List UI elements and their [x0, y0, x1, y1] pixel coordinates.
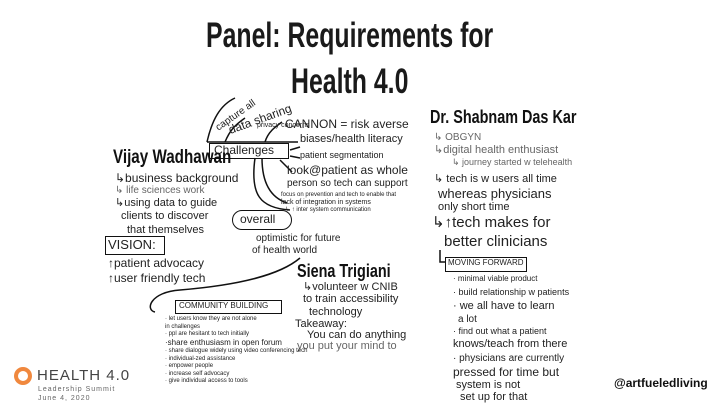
- panel: challenges: Challenges: [214, 143, 274, 157]
- community building list: ·share enthusiasm in open forum: [165, 338, 282, 346]
- community building list: · let users know they are not alone: [165, 316, 257, 322]
- speaker: Dr. Shabnam Das Kar: pressed for time but: [453, 365, 559, 379]
- community building list: in challenges: [165, 324, 200, 330]
- speaker: Vijay Wadhawan: VISION:: [108, 237, 156, 252]
- speaker: Dr. Shabnam Das Kar: · build relationship w patients: [453, 287, 569, 297]
- title: [206, 16, 493, 101]
- speaker: Dr. Shabnam Das Kar: ↳↑tech makes for: [432, 214, 550, 231]
- speaker: Dr. Shabnam Das Kar: a lot: [458, 314, 477, 325]
- overall callout: of health world: [252, 245, 317, 256]
- speaker: Vijay Wadhawan: ↑user friendly tech: [108, 271, 205, 285]
- speaker: Vijay Wadhawan: ↳ life sciences work: [115, 185, 205, 196]
- credit: @artfueledliving: [614, 376, 708, 390]
- panel: challenges: ↳ ↑ inter system communication: [285, 207, 371, 213]
- speaker: Dr. Shabnam Das Kar: [430, 107, 576, 403]
- speaker: Siena Trigiani: [295, 261, 406, 352]
- speaker: Siena Trigiani: Takeaway:: [295, 318, 347, 330]
- speaker: Vijay Wadhawan: that themselves: [127, 224, 204, 236]
- logo: Health 4.0: [14, 367, 130, 402]
- community building list: · ppl are hesitant to tech initially: [165, 331, 249, 337]
- speaker: Dr. Shabnam Das Kar: ↳ journey started w telehealth: [452, 157, 572, 167]
- panel: challenges: patient segmentation: [300, 150, 384, 160]
- community building list: COMMUNITY BUILDING: [179, 301, 268, 310]
- speaker: Dr. Shabnam Das Kar: · minimal viable product: [453, 274, 537, 283]
- panel: challenges: biases/health literacy: [300, 133, 403, 145]
- speaker: Vijay Wadhawan: [105, 147, 238, 285]
- logo: Health 4.0: Leadership Summit: [38, 386, 115, 393]
- speaker: Siena Trigiani: ↳volunteer w CNIB: [303, 281, 398, 293]
- speaker: Siena Trigiani: you put your mind to: [297, 340, 397, 352]
- speaker: Dr. Shabnam Das Kar: · physicians are currently: [453, 353, 564, 364]
- panel: challenges: person so tech can support: [287, 178, 408, 189]
- speaker: Vijay Wadhawan: Vijay Wadhawan: [113, 147, 231, 168]
- logo: Health 4.0: HEALTH 4.0: [37, 367, 130, 384]
- speaker: Dr. Shabnam Das Kar: better clinicians: [444, 233, 547, 250]
- speaker: Dr. Shabnam Das Kar: system is not: [456, 379, 520, 391]
- speaker: Siena Trigiani: technology: [309, 306, 362, 318]
- overall callout: overall: [240, 212, 275, 226]
- speaker: Vijay Wadhawan: ↳business background: [115, 171, 238, 185]
- speaker: Vijay Wadhawan: ↑patient advocacy: [108, 256, 204, 270]
- panel: challenges: lack of integration in systems: [281, 199, 371, 206]
- title: Health 4.0: [291, 62, 408, 101]
- community building list: · increase self advocacy: [165, 370, 229, 376]
- community building list: · share dialogue widely using video conferencing tech: [165, 348, 307, 354]
- speaker: Dr. Shabnam Das Kar: ↳ tech is w users all time: [434, 173, 557, 185]
- speaker: Siena Trigiani: You can do anything: [307, 329, 406, 341]
- overall callout: [232, 210, 340, 256]
- panel: challenges: privacy concerns: [257, 122, 310, 129]
- community building list: · empower people: [165, 363, 213, 369]
- speaker: Dr. Shabnam Das Kar: knows/teach from there: [453, 338, 567, 350]
- speaker: Vijay Wadhawan: ↳using data to guide: [115, 197, 217, 209]
- speaker: Vijay Wadhawan: clients to discover: [121, 210, 208, 222]
- panel: challenges: focus on prevention and tech to enable that: [281, 192, 396, 198]
- community building list: · give individual access to tools: [165, 378, 248, 384]
- speaker: Dr. Shabnam Das Kar: whereas physicians: [438, 186, 551, 201]
- speaker: Dr. Shabnam Das Kar: ↳ OBGYN: [434, 132, 481, 143]
- speaker: Dr. Shabnam Das Kar: set up for that: [460, 391, 527, 403]
- panel: challenges: capture all: [214, 98, 258, 133]
- speaker: Dr. Shabnam Das Kar: MOVING FORWARD: [448, 258, 524, 267]
- community building list: · individual-zed assistance: [165, 356, 235, 362]
- panel: challenges: data sharing: [227, 101, 293, 137]
- overall callout: optimistic for future: [256, 233, 340, 244]
- speaker: Dr. Shabnam Das Kar: only short time: [438, 201, 510, 213]
- community building list: [165, 300, 308, 384]
- speaker: Siena Trigiani: to train accessibility: [303, 293, 398, 305]
- logo: Health 4.0: June 4, 2020: [38, 395, 90, 402]
- title: Panel: Requirements for: [206, 16, 493, 55]
- panel: challenges: look@patient as whole: [287, 163, 408, 177]
- panel: challenges: CANNON = risk averse: [285, 117, 409, 131]
- speaker: Dr. Shabnam Das Kar: Dr. Shabnam Das Kar: [430, 107, 576, 127]
- speaker: Siena Trigiani: Siena Trigiani: [297, 261, 391, 281]
- speaker: Dr. Shabnam Das Kar: ↳digital health enthusiast: [434, 144, 558, 156]
- speaker: Dr. Shabnam Das Kar: · find out what a patient: [453, 326, 547, 336]
- panel: challenges: [209, 98, 409, 213]
- speaker: Dr. Shabnam Das Kar: · we all have to learn: [453, 300, 554, 312]
